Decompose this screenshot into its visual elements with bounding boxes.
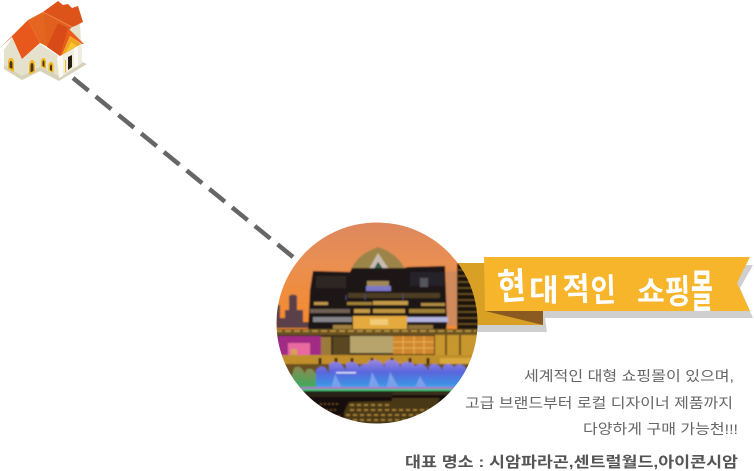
mall floors xyxy=(348,293,440,298)
boat xyxy=(344,398,440,424)
distant skyline xyxy=(276,294,310,328)
banner title xyxy=(497,266,713,317)
banner title: 적 xyxy=(562,271,590,308)
banner title: 대 xyxy=(529,273,559,308)
banner shadow xyxy=(450,265,753,332)
banner title: 핑 xyxy=(664,273,691,312)
right towers xyxy=(446,271,458,326)
podium shops xyxy=(277,334,436,356)
plaza lights xyxy=(282,354,472,365)
mall upper block xyxy=(308,266,447,332)
banner fold shade xyxy=(485,311,543,325)
banner title: 인 xyxy=(590,273,616,310)
icon: temple xyxy=(1,1,87,81)
description text xyxy=(465,368,738,437)
mall sign xyxy=(366,286,391,291)
dashed route line xyxy=(73,78,293,257)
representative places: 대표 명소 : 시암파라곤,센트럴월드,아이콘시암 xyxy=(405,454,738,471)
description text: 세계적인 대형 쇼핑몰이 있으며, xyxy=(524,368,734,384)
banner fold xyxy=(450,263,543,325)
banner ribbon xyxy=(484,257,750,311)
crown of the mall xyxy=(352,246,404,270)
description text: 고급 브랜드부터 로컬 디자이너 제품까지 xyxy=(465,395,733,411)
photo: shopping mall at dusk xyxy=(276,222,478,424)
fountain xyxy=(285,363,469,378)
ribbon banner xyxy=(450,257,753,332)
description text: 다양하게 구매 가능천!!! xyxy=(583,421,738,437)
banner title: 몰 xyxy=(691,267,713,317)
banner title: 현 xyxy=(497,266,527,309)
banner title: 쇼 xyxy=(637,276,665,309)
waterfront xyxy=(302,390,452,424)
mall lobby and windows xyxy=(353,316,407,331)
